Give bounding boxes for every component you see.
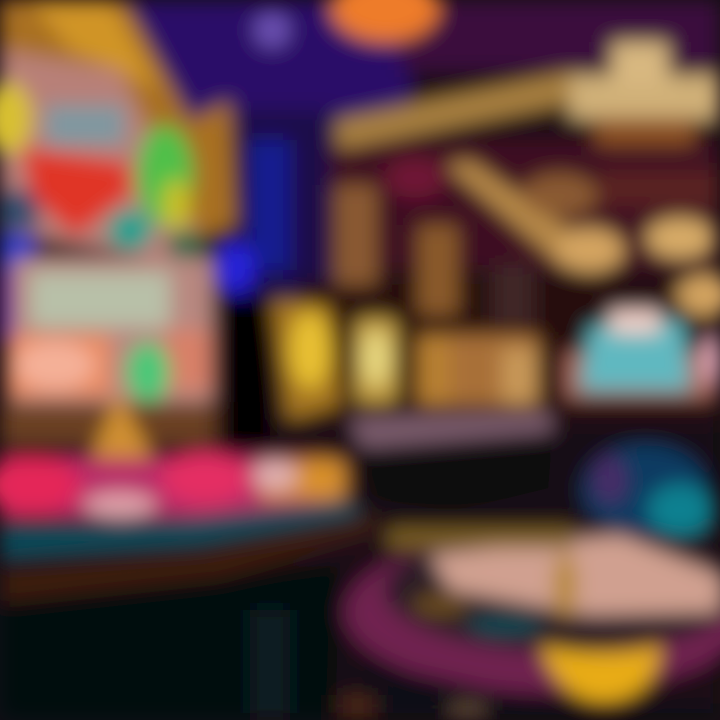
gold beam bbox=[335, 72, 590, 268]
blue light column bbox=[0, 140, 290, 340]
table rim bbox=[0, 500, 375, 602]
centre slot machines bbox=[272, 185, 538, 420]
upper slot machine bbox=[0, 50, 203, 265]
chandelier bbox=[385, 42, 720, 315]
table pedestal bbox=[0, 565, 340, 720]
right slot machine bbox=[565, 310, 720, 536]
centre counter bbox=[350, 412, 552, 512]
dark foreground bbox=[340, 660, 720, 720]
pink table band bbox=[0, 452, 345, 518]
gold base bbox=[0, 392, 215, 482]
lower slot machine bbox=[10, 258, 212, 403]
yellow chip shape bbox=[540, 645, 662, 703]
roulette table bbox=[345, 528, 720, 692]
gold triangle top left bbox=[0, 0, 235, 240]
ceiling lights bbox=[254, 0, 439, 48]
black column bbox=[226, 298, 270, 442]
